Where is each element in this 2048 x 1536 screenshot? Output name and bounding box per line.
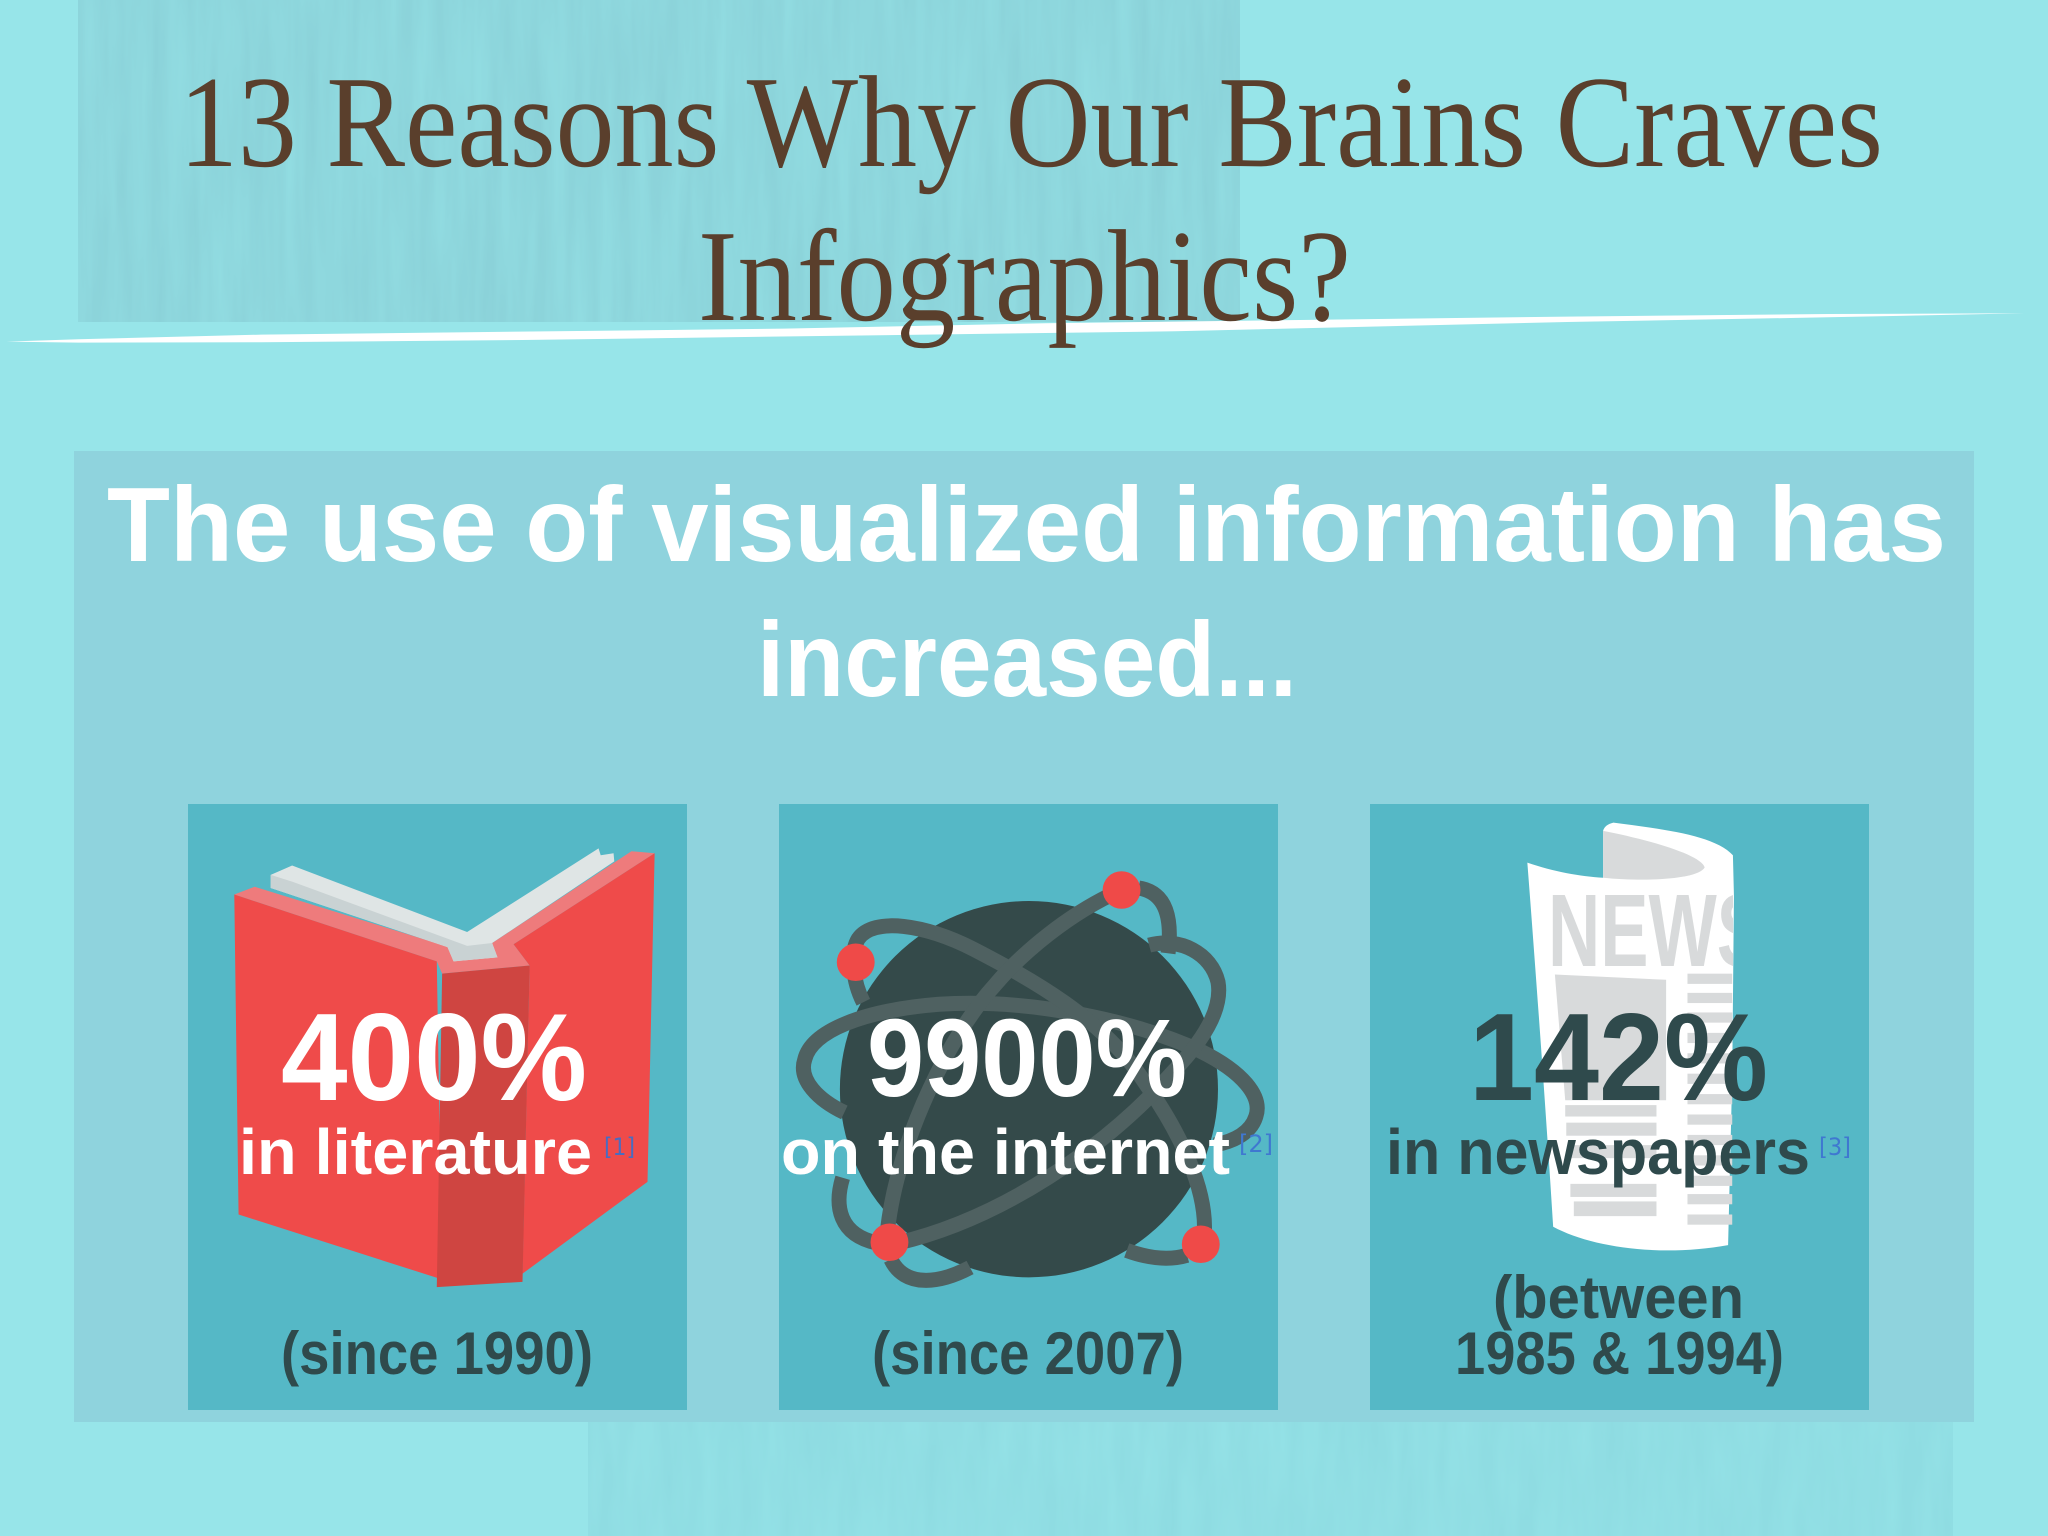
panel: visualized information <box>74 451 1974 1422</box>
panel heading: The use of visualized information has <box>107 466 1946 584</box>
panel heading <box>107 466 1946 719</box>
white brush stroke divider <box>7 313 2024 343</box>
icon: globe with orbits <box>803 871 1257 1280</box>
title: Infographics? <box>698 204 1351 349</box>
stat: 9900%: 9900% <box>867 997 1187 1120</box>
stat: 400%: 400% <box>281 989 587 1127</box>
card: newspapers <box>1370 804 1869 1410</box>
label: on the internet: on the internet <box>781 1116 1230 1188</box>
panel heading: increased... <box>757 601 1297 719</box>
title <box>179 50 1883 349</box>
reference 1: [1] <box>604 1133 635 1161</box>
card: internet <box>779 804 1278 1410</box>
icon: newspaper <box>1527 822 1734 1250</box>
reference 2: [2] <box>1239 1130 1273 1158</box>
icon: newspaper: NEWS <box>1548 873 1765 988</box>
period: since 2007: (since 2007) <box>872 1320 1184 1387</box>
period: since 1990: (since 1990) <box>281 1320 593 1387</box>
label: in literature: in literature <box>239 1116 592 1188</box>
period: between 1985 and 1994: (between <box>1493 1264 1744 1331</box>
title: 13 Reasons Why Our Brains Craves <box>179 50 1883 195</box>
label: in newspapers: in newspapers <box>1386 1116 1810 1188</box>
reference 3: [3] <box>1819 1133 1851 1161</box>
period: between 1985 and 1994 <box>1455 1264 1784 1387</box>
period: between 1985 and 1994: 1985 & 1994) <box>1455 1320 1784 1387</box>
stat: 142%: 142% <box>1469 989 1768 1127</box>
icon: red book <box>234 848 655 1287</box>
card: literature <box>188 804 687 1410</box>
